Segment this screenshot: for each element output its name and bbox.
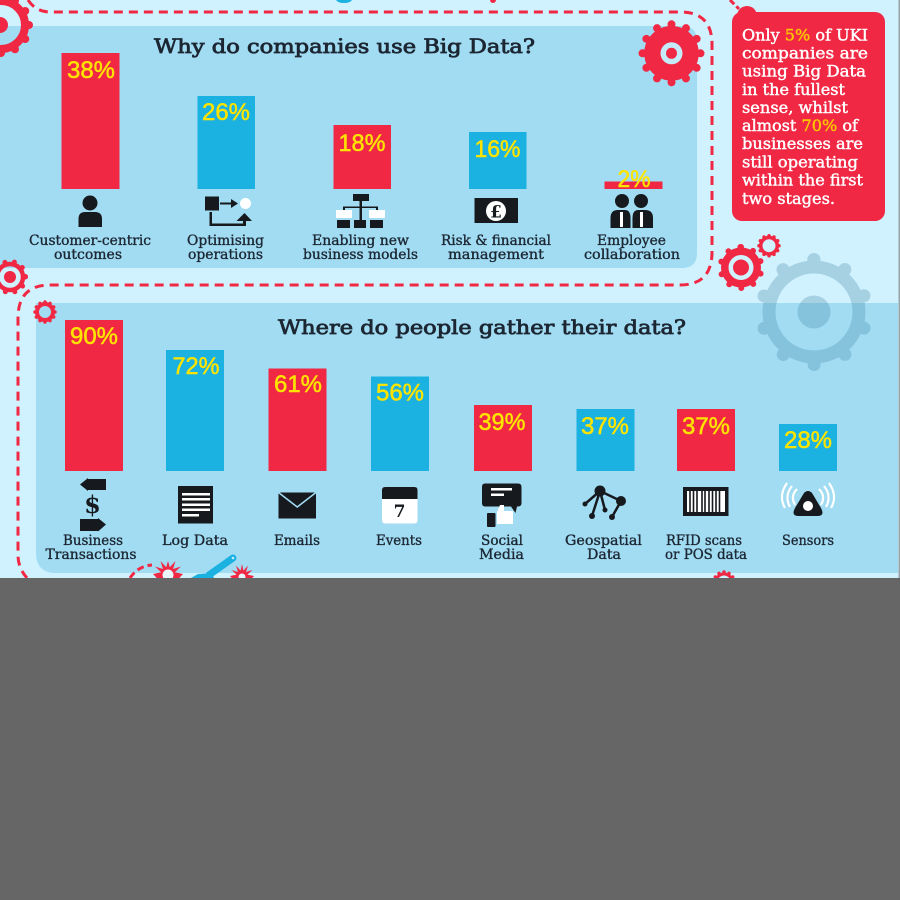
bar: employee collaboration 2% — [604, 166, 662, 193]
icon: red gear, left of lower panel — [0, 262, 26, 292]
bar: enabling new business models 18% — [334, 125, 391, 189]
heading: where people gather data: Where do people gather their data? — [278, 315, 686, 339]
icon: dollar exchange: $ — [84, 490, 101, 519]
label: events: Events — [376, 533, 422, 549]
callout: UKI statistic — [732, 12, 885, 221]
callout: UKI statistic: businesses are — [742, 134, 863, 153]
icon: notepad — [178, 486, 213, 524]
icon: chat bubble and thumbs up — [482, 484, 522, 527]
label: emails: Emails — [274, 533, 320, 549]
bar: geospatial data 37% — [576, 409, 634, 471]
label: enabling new business models: business models — [303, 247, 418, 263]
icon: network nodes — [582, 486, 626, 520]
icon: banknote: £ — [490, 202, 502, 222]
icon: barcode — [683, 487, 728, 516]
icon: gear on callout — [737, 6, 757, 26]
heading: why companies use Big Data: Why do companies use Big Data? — [154, 34, 535, 58]
callout: UKI statistic: within the first — [742, 170, 864, 190]
label: geospatial data — [565, 533, 642, 563]
icon: envelope — [278, 492, 316, 518]
icon: person — [78, 196, 102, 227]
callout: UKI statistic: Only 5% of UKI — [742, 26, 868, 44]
label: business transactions: Transactions — [46, 547, 137, 563]
label: social media: Media — [479, 547, 524, 563]
label: social media — [479, 533, 524, 563]
bar: RFID scans or POS data 37% — [677, 409, 735, 471]
icon: calendar — [382, 487, 418, 524]
grey lower area — [0, 578, 900, 900]
label: enabling new business models — [303, 233, 418, 263]
bar: enabling new business models 18%: 18% — [338, 130, 386, 157]
bar: employee collaboration 2%: 2% — [618, 166, 650, 193]
icon: process flow — [205, 196, 252, 226]
label: employee collaboration: collaboration — [584, 247, 680, 263]
bar: geospatial data 37%: 37% — [581, 413, 629, 440]
bar: business transactions 90% — [65, 320, 123, 471]
dashed line to callout — [730, 0, 739, 9]
icon: top-left red gear — [0, 0, 29, 53]
bar: events 56%: 56% — [376, 380, 424, 406]
bar: optimising operations 26%: 26% — [202, 99, 250, 126]
icon: calendar: 7 — [394, 502, 405, 522]
bar: social media 39%: 39% — [478, 409, 526, 436]
label: employee collaboration — [584, 233, 680, 263]
bar: customer-centric outcomes 38% — [62, 53, 120, 189]
right edge line — [898, 0, 900, 578]
label: optimising operations — [187, 233, 264, 263]
callout: UKI statistic: two stages. — [742, 189, 835, 208]
dashed connector line — [18, 0, 712, 578]
icon: small red gear in lower panel — [35, 302, 55, 322]
icon: two employees — [610, 194, 653, 228]
icon: large red gear in upper panel — [642, 24, 700, 82]
label: employee collaboration: Employee — [597, 233, 666, 249]
bar: risk and financial management 16% — [469, 132, 526, 189]
label: optimising operations: Optimising — [187, 233, 264, 249]
panel background: where people gather data — [36, 303, 898, 573]
bar: business transactions 90%: 90% — [70, 323, 118, 350]
label: log data: Log Data — [162, 533, 228, 549]
label: risk and financial management: management — [448, 247, 545, 263]
bar: log data 72% — [166, 350, 224, 471]
label: RFID scans or POS data: RFID scans — [666, 533, 742, 549]
label: RFID scans or POS data: or POS data — [665, 547, 747, 563]
label: geospatial data: Data — [587, 547, 621, 563]
bar: events 56% — [371, 376, 429, 471]
callout: UKI statistic: still operating — [742, 152, 858, 172]
bar: log data 72%: 72% — [172, 353, 220, 380]
decorative cluster at bottom of lower panel: dashed arc, bursts and brush — [130, 557, 254, 590]
bar: risk and financial management 16%: 16% — [474, 136, 520, 163]
icon: large grey gear — [762, 260, 866, 364]
label: business transactions — [46, 533, 137, 563]
label: social media: Social — [481, 533, 523, 549]
page background — [0, 0, 900, 578]
icon: sensor — [782, 483, 834, 516]
icon: banknote — [474, 198, 518, 223]
callout: UKI statistic: sense, whilst — [742, 98, 849, 117]
bar: emails 61% — [268, 368, 326, 471]
icon: pair of red gears — [720, 236, 779, 288]
bar: emails 61%: 61% — [274, 371, 322, 398]
label: enabling new business models: Enabling new — [312, 233, 409, 249]
clipped red dot at top edge — [490, 0, 496, 3]
callout: UKI statistic: almost 70% of — [742, 116, 859, 135]
bar: sensors 28% — [779, 424, 837, 471]
label: customer-centric outcomes: outcomes — [54, 247, 122, 263]
bar: RFID scans or POS data 37%: 37% — [682, 413, 730, 440]
label: risk and financial management — [441, 233, 551, 263]
label: geospatial data: Geospatial — [565, 533, 642, 549]
label: optimising operations: operations — [188, 247, 263, 263]
icon: dollar exchange — [80, 478, 106, 532]
callout: UKI statistic: companies are — [742, 44, 868, 62]
label: sensors: Sensors — [782, 533, 834, 549]
bar: sensors 28%: 28% — [784, 427, 832, 454]
bar: optimising operations 26% — [198, 96, 255, 189]
callout: UKI statistic: using Big Data — [742, 62, 866, 80]
label: business transactions: Business — [63, 533, 123, 549]
label: customer-centric outcomes — [29, 233, 151, 263]
clipped element at top edge — [336, 0, 352, 3]
bar: social media 39% — [474, 405, 532, 471]
bar: customer-centric outcomes 38%: 38% — [67, 57, 115, 84]
gear clipped at bottom of lower panel — [714, 572, 734, 592]
icon: organisation chart — [336, 194, 385, 228]
label: customer-centric outcomes: Customer-centric — [29, 233, 151, 249]
label: RFID scans or POS data — [665, 533, 747, 563]
label: risk and financial management: Risk & financial — [441, 233, 551, 249]
panel background: why companies use Big Data — [0, 26, 697, 268]
callout: UKI statistic: in the fullest — [742, 80, 846, 99]
